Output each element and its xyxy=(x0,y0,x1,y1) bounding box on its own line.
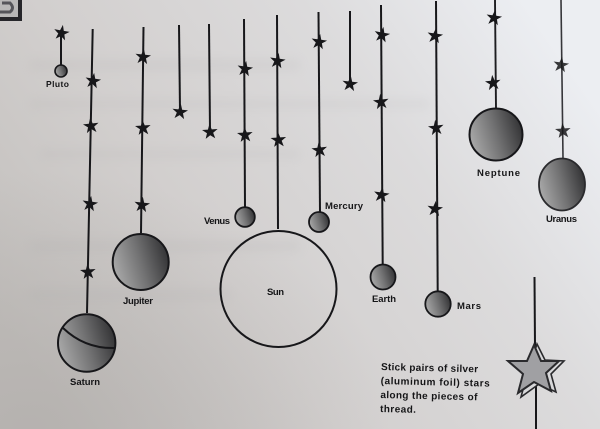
Mars hanging planet xyxy=(425,1,481,317)
foil star diagram xyxy=(508,277,564,429)
instruction text: thread. xyxy=(380,404,416,416)
Saturn hanging planet: Saturn xyxy=(70,377,100,388)
Pluto hanging planet xyxy=(46,24,71,89)
Earth hanging planet: Earth xyxy=(372,294,396,305)
Uranus hanging planet xyxy=(539,0,585,225)
instruction text: (aluminum foil) stars xyxy=(381,376,490,390)
Sun hanging planet: Sun xyxy=(267,287,284,298)
Neptune hanging planet: Neptune xyxy=(477,168,520,179)
Sun hanging planet xyxy=(220,15,336,347)
Jupiter hanging planet: Jupiter xyxy=(123,296,153,307)
Jupiter hanging planet xyxy=(113,27,169,307)
icon: corner spiral box xyxy=(0,0,22,21)
instruction text: along the pieces of xyxy=(380,390,478,403)
Neptune hanging planet xyxy=(470,0,522,179)
Pluto hanging planet: Pluto xyxy=(46,79,69,89)
Earth hanging planet xyxy=(370,5,396,305)
Mars hanging planet: Mars xyxy=(457,301,481,312)
Venus hanging planet xyxy=(204,19,255,227)
Uranus hanging planet: Uranus xyxy=(546,214,577,225)
Mercury hanging planet xyxy=(309,12,364,232)
star-only thread 1 xyxy=(172,25,189,119)
instruction text xyxy=(380,362,491,418)
star-only thread 3 xyxy=(342,11,359,91)
instruction text: Stick pairs of silver xyxy=(381,362,478,375)
Venus hanging planet: Venus xyxy=(204,216,230,227)
star-only thread 2 xyxy=(202,24,218,139)
Saturn hanging planet xyxy=(58,29,115,388)
Mercury hanging planet: Mercury xyxy=(325,201,364,212)
